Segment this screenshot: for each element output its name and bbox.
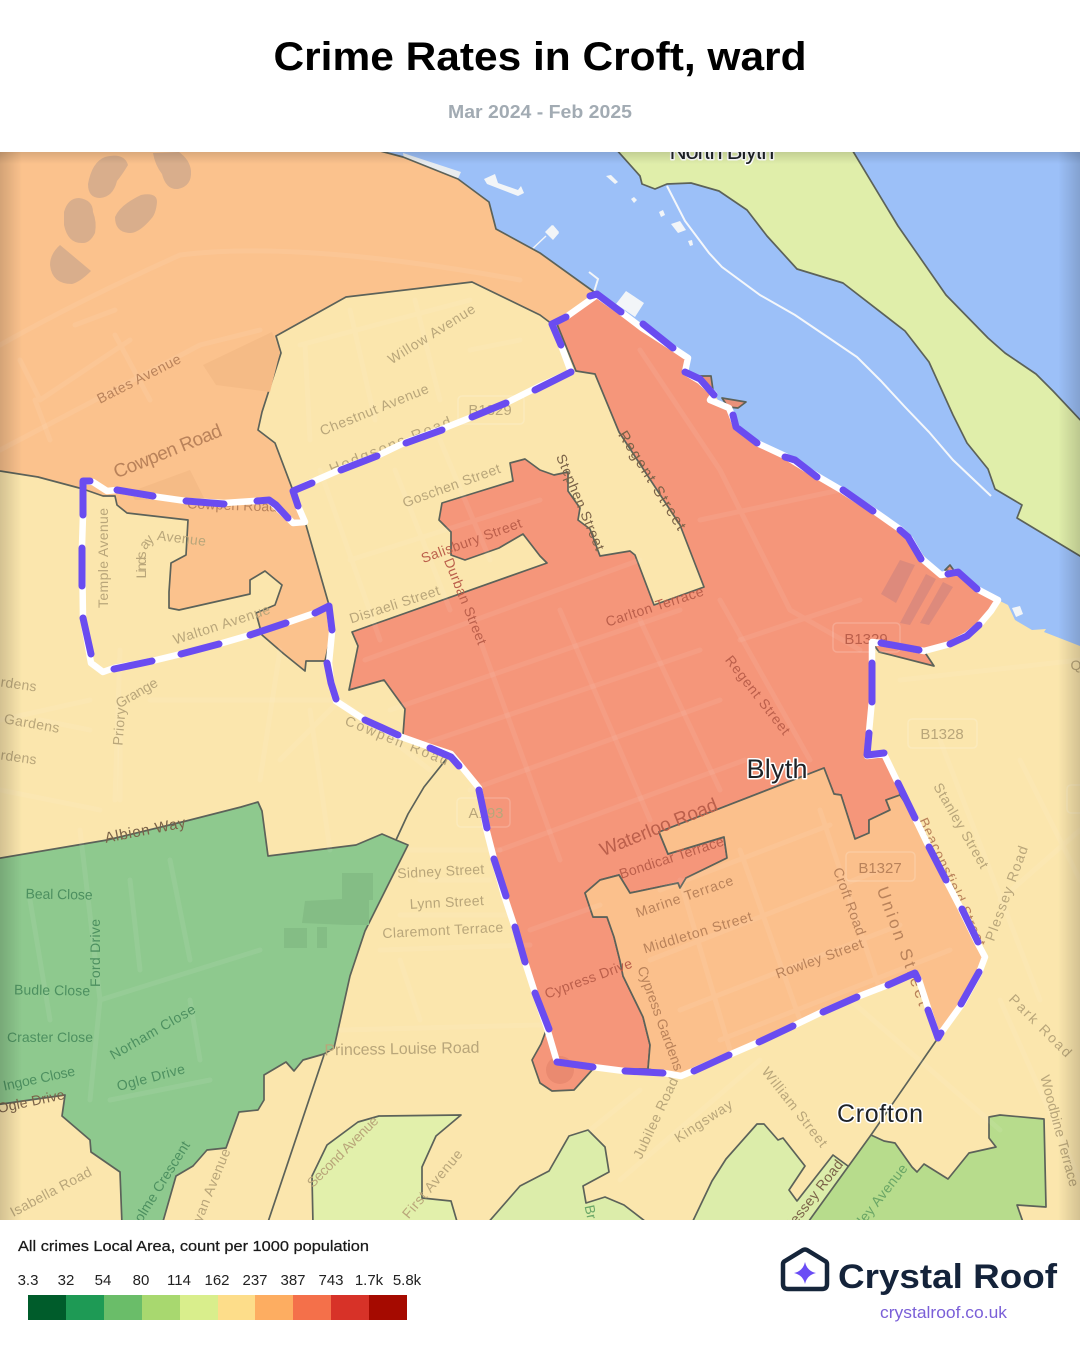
legend values [18,1272,422,1289]
legend title: All crimes Local Area, count per 1000 population [18,1238,369,1255]
street labels: Second Avenue [304,1112,381,1190]
street labels: Ford Drive [87,919,103,987]
shield labels [468,402,964,877]
subtitle: date range: Mar 2024 - Feb 2025 [448,101,632,122]
ward boundary: white casing [82,295,998,1076]
breakwater [667,186,991,496]
street labels: Regent Street [722,652,794,738]
street labels: Jubilee Road [630,1075,681,1161]
icon: house with star [783,1250,827,1289]
ponds [50,152,191,284]
legend values: 80 [133,1272,149,1289]
place labels [670,138,923,1128]
street labels: Bates Avenue [94,350,184,407]
legend values: 32 [58,1272,74,1289]
legend values: 5.8k [393,1272,422,1289]
street labels: yan Avenue [189,1146,233,1224]
street labels: Park Road [1006,991,1075,1060]
region: north-west orange [0,147,597,671]
street labels: Disraeli Street [347,582,442,626]
legend colour scale [28,1295,407,1320]
logo: Crystal Roof [783,1250,1058,1322]
legend values: 1.7k [355,1272,384,1289]
street labels: Temple Avenue [95,508,111,608]
place labels: Crofton [837,1100,923,1128]
ward boundary: purple dashes [82,294,979,1073]
street labels: Salisbury Street [419,515,524,566]
shield labels: B1329 [844,631,888,648]
region: North Blyth [615,148,1080,559]
street labels: Linds [133,552,149,578]
street labels: rdens [0,747,38,767]
street labels: Croft Road [830,865,869,937]
street labels: Chestnut Avenue [317,380,431,439]
street labels: Gardens [3,710,61,736]
street labels: Br [582,1203,600,1221]
legend values: 743 [318,1272,344,1289]
legend values: 387 [280,1272,306,1289]
boundary lines between wards [267,757,938,1225]
street labels: Stanley Street [930,780,992,871]
red slivers outside boundary [695,376,955,572]
road network (faint) [42,348,990,1132]
street labels: William Street [759,1064,831,1150]
street labels: Beaconsfield Street [916,815,989,949]
legend values: 114 [167,1272,191,1289]
street labels: Isabella Road [7,1163,94,1220]
place labels: Blyth [746,754,808,784]
street labels: rdens [0,674,38,694]
street labels: olme Crescent [131,1138,193,1225]
street labels: ay [136,531,157,552]
map edge shading [0,152,1080,1220]
street labels: Claremont Terrace [382,919,504,941]
street labels: Ogle Drive [115,1060,187,1094]
school buildings on green [284,873,373,948]
street labels [0,300,1080,1237]
street labels: Plessey Road [778,1157,846,1237]
street labels: Lynn Street [409,892,484,912]
place labels: North Blyth [670,138,774,165]
street labels: Beal Close [25,885,93,903]
street labels: Cowpen Road [343,712,451,768]
street labels: Walton Avenue [171,601,272,647]
street labels: Rowley Street [773,935,865,982]
street labels: Norham Close [107,1001,198,1063]
street labels: Bondicar Terrace [617,833,726,882]
shield labels: B1329 [468,402,512,419]
street labels: Budle Close [14,981,90,999]
region: light green Second Avenue [312,1115,461,1225]
region: south-east orange (Union Street) [585,768,985,1076]
legend [18,1238,422,1320]
shield labels: B1327 [858,860,902,877]
street labels: Hodgsons Road [327,414,454,478]
street labels: Regent Street [614,428,690,534]
street labels: Grange [113,674,161,711]
street labels: Albion Way [103,814,188,847]
street labels: Cowpen Road [187,495,277,515]
street labels: Union Street [873,884,934,1008]
region: main red area [349,294,998,1091]
street labels: Sidney Street [397,861,485,881]
street labels: Plessey Road [982,844,1031,943]
street labels: ley Avenue [854,1160,911,1227]
street labels: Cowpen Road [111,421,225,483]
harbour sheds on red area [546,560,953,1084]
street labels: Avenue [156,527,207,549]
street labels: Craster Close [7,1029,93,1045]
street labels: Goschen Street [400,460,503,510]
legend values: 162 [204,1272,230,1289]
street labels: Princess Louise Road [324,1040,480,1059]
legend values: 237 [242,1272,268,1289]
logo wordmark: Crystal Roof [838,1258,1058,1296]
street labels: Cypress Drive [542,955,634,1002]
logo url: crystalroof.co.uk [880,1304,1008,1322]
street labels: First Avenue [399,1146,466,1221]
street labels: Carlton Terrace [603,583,706,630]
street labels: Kingsway [671,1096,735,1145]
street labels: Marine Terrace [634,872,735,920]
shield labels: A193 [468,805,504,822]
street labels: Cypress Gardens [634,964,687,1073]
street labels: Priory [109,707,129,746]
legend values: 3.3 [18,1272,38,1289]
street labels: Willow Avenue [385,300,478,367]
street labels: Waterloo Road [597,795,721,861]
region: light green south [691,1124,852,1225]
street labels: Durban Street [441,555,490,647]
street labels: Stephen Street [553,452,608,553]
title: Crime Rates in Croft, ward [274,35,806,79]
region: light green south centre [486,1130,650,1225]
darker land patches [268,348,280,392]
region: mid green Crofton [806,1115,1046,1225]
legend values: 54 [95,1272,111,1289]
street labels: Middleton Street [641,908,754,956]
water: River Blyth [375,152,1080,646]
jetties and piers [403,153,1023,617]
region: green Ogle Drive area [0,802,408,1225]
road shields [457,396,1080,881]
street labels: Ingoe Close [2,1063,77,1094]
shield labels: B1328 [920,726,964,743]
